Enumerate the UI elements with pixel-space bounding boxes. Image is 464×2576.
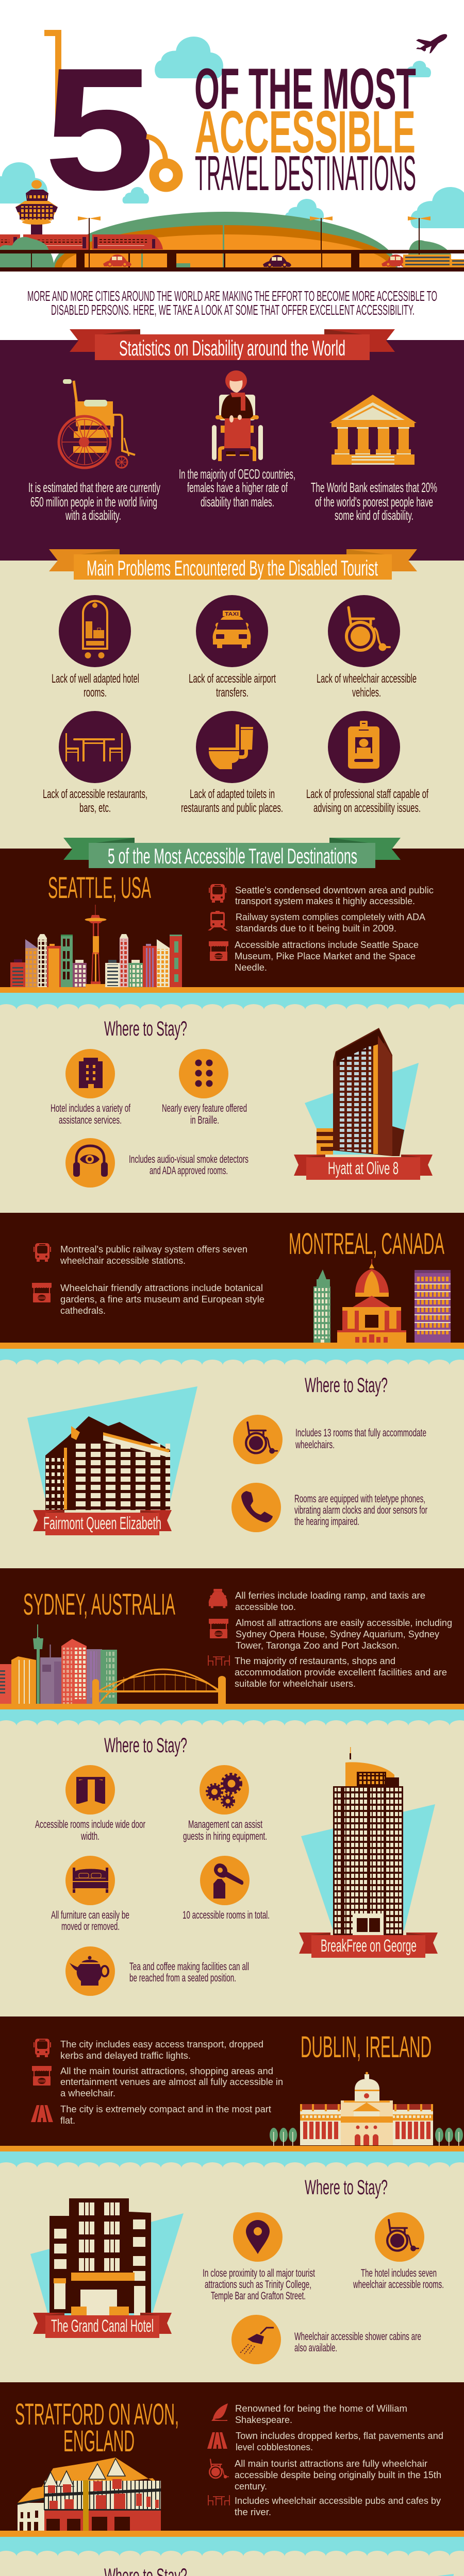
text: fully accessible: All main tourist attractions are fully wheelchair — [235, 2458, 427, 2469]
text: smoke detectors: and ADA approved rooms. — [150, 1164, 228, 1177]
icon: wheelchair — [328, 595, 400, 667]
text: pubs: Includes wheelchair accessible pubs and cafes by — [235, 2495, 441, 2506]
icon: shower — [231, 2315, 281, 2364]
numeral five with wheelchair handle — [44, 30, 178, 226]
icon: market stall — [209, 1619, 228, 1638]
text: tea and coffee: Tea and coffee making facilities can all — [129, 1960, 249, 1973]
heading: where to stay: Where to Stay? — [305, 1374, 388, 1397]
text: assistance: assistance services. — [59, 1114, 122, 1126]
icon: braille dots — [179, 1049, 228, 1098]
icon: wheelchair — [59, 379, 135, 468]
text: Seattle railway: standards due to it being built in 2009. — [236, 923, 396, 934]
elevated road — [0, 250, 464, 272]
text: restaurants — [43, 787, 147, 815]
icon: market stall — [209, 941, 228, 961]
illustration: Sydney skyline — [0, 1624, 226, 1704]
icon: wheelchair — [209, 2459, 228, 2479]
panel: Sydney where to stay — [35, 1734, 438, 1996]
heading: where to stay: Where to Stay? — [104, 1018, 187, 1040]
heading ribbon: main problems — [49, 549, 417, 580]
control tower — [15, 180, 58, 234]
icon: train — [208, 911, 228, 930]
text: compact: The city is extremely compact and in the most part — [60, 2104, 271, 2114]
icon: hotel building — [65, 1049, 115, 1098]
text: restaurants: Lack of accessible restaurants, — [43, 787, 147, 801]
text: assistance: Hotel includes a variety of — [51, 1102, 130, 1114]
text: staff — [306, 787, 428, 815]
text: Montreal attractions: cathedrals. — [60, 1305, 106, 1316]
text: Dublin transport: The city includes easy access transport, dropped — [60, 2039, 263, 2049]
text: fully accessible: century. — [235, 2481, 267, 2492]
illustration: Hyatt at Olive 8: Hyatt at Olive 8 — [328, 1159, 399, 1178]
illustration: Dublin building — [270, 2072, 463, 2146]
text: Sydney attractions: Tower, Taronga Zoo and Port Jackson. — [236, 1640, 400, 1651]
text: OECD females — [179, 466, 295, 510]
icon: bank — [329, 395, 417, 465]
text: wide door — [35, 1818, 145, 1842]
handle bar — [44, 30, 61, 126]
panel: Dublin where to stay — [30, 2176, 444, 2364]
text: braille: in Braille. — [190, 1114, 219, 1126]
text: proximity: In close proximity to all major tourist — [203, 2267, 315, 2279]
text: Dublin attractions — [60, 2065, 283, 2098]
illustration: airport scene — [0, 180, 464, 272]
title — [194, 57, 416, 201]
text: tea and coffee — [129, 1960, 249, 1984]
floor and scallop band — [0, 2146, 464, 2168]
text: pubs: the river. — [235, 2506, 271, 2517]
panel: Sydney — [0, 1568, 464, 1726]
floor and scallop band — [0, 2531, 464, 2556]
text: Montreal railway — [60, 1244, 247, 1266]
panel: hero header — [0, 0, 464, 340]
text: Sydney restaurants: The majority of restaurants, shops and — [235, 1655, 395, 1666]
text: airport transfers — [189, 672, 276, 700]
text: Montreal railway: wheelchair accessible stations. — [60, 1255, 186, 1266]
icon: taxi: TAXI — [225, 611, 239, 617]
icon: id badge — [328, 711, 400, 783]
icon: luggage cart — [59, 595, 131, 667]
text: kerbs — [236, 2430, 443, 2452]
icon: key — [200, 1856, 250, 1905]
icon: map pin — [233, 2212, 283, 2262]
text: Seattle attractions — [235, 939, 419, 973]
icon: bus — [209, 884, 226, 903]
heading: where to stay: Where to Stay? — [104, 1734, 187, 1757]
text: Seattle railway: Railway system complies completely with ADA — [236, 911, 426, 922]
text: shower cabins: also available. — [294, 2342, 337, 2354]
illustration: BreakFree on George — [299, 1747, 438, 1958]
text: ten rooms: 10 accessible rooms in total. — [183, 1909, 270, 1921]
icon: plane — [416, 34, 447, 54]
text: seven rooms — [353, 2267, 444, 2291]
illustration: Stratford Tudor house — [18, 2458, 161, 2531]
text: rooms: wheelchairs. — [295, 1438, 335, 1451]
trees — [270, 2128, 463, 2146]
text: braille: Nearly every feature offered — [162, 1102, 247, 1114]
text: Shakespeare: Renowned for being the home of William — [235, 2403, 407, 2414]
text: Seattle railway — [236, 911, 426, 934]
text: furniture — [51, 1909, 129, 1933]
text: Sydney restaurants: suitable for wheelchair users. — [235, 1678, 356, 1689]
heading: where to stay: Where to Stay? — [305, 2176, 388, 2199]
icon: table — [208, 1655, 229, 1666]
text: teletype — [294, 1493, 427, 1528]
text: furniture: moved or removed. — [61, 1920, 120, 1933]
panel: Seattle — [0, 838, 464, 1010]
text: rooms — [295, 1427, 426, 1451]
city name: Sydney: SYDNEY, AUSTRALIA — [23, 1588, 175, 1621]
text: hotel rooms: Lack of well adapted hotel — [52, 672, 139, 686]
icon: door — [65, 1765, 115, 1815]
panel: Montreal — [0, 1213, 464, 1365]
icon: wheelchair — [233, 1415, 283, 1464]
text: assistance — [51, 1102, 130, 1126]
text: wide door: width. — [80, 1830, 100, 1842]
text: OECD females: In the majority of OECD countries, — [179, 466, 295, 482]
text: Dublin transport: kerbs and delayed traffic lights. — [60, 2050, 191, 2061]
icon: wheelchair — [375, 2212, 424, 2262]
illustration: Montreal buildings — [313, 1259, 451, 1343]
text: Dublin attractions: All the main tourist attractions, shopping areas and — [60, 2065, 273, 2076]
terminal building — [403, 255, 464, 267]
icon: taxi — [209, 1589, 227, 1608]
icon: road — [31, 2105, 53, 2122]
wheelchair wheel — [146, 137, 178, 187]
text: Sydney attractions — [236, 1617, 452, 1651]
icon: bus — [34, 1243, 51, 1262]
text: Dublin transport — [60, 2039, 263, 2061]
text: Seattle attractions: Needle. — [235, 962, 267, 973]
text: 650 million — [28, 480, 160, 523]
text: teletype: the hearing impaired. — [294, 1515, 359, 1528]
clouds — [0, 37, 464, 228]
text: Sydney ferries: accessible too. — [235, 1601, 296, 1612]
text: Sydney restaurants — [235, 1655, 447, 1689]
text: Seattle transport — [235, 885, 434, 906]
text: proximity: attractions such as Trinity College, — [205, 2278, 311, 2291]
text: tea and coffee: be reached from a seated position. — [129, 1972, 236, 1984]
panel: Stratford: STRATFORD ON AVON, — [15, 2398, 179, 2431]
icon: bed — [65, 1856, 115, 1905]
icon: road — [207, 2432, 227, 2449]
text: hotel rooms — [52, 672, 139, 700]
panel: Seattle where to stay — [51, 1018, 433, 1188]
icon: table — [208, 2495, 229, 2505]
text: Seattle transport: Seattle's condensed downtown area and public — [235, 885, 434, 895]
text: Seattle transport: transport system makes it highly accessible. — [235, 895, 415, 906]
text: wheelchair vehicles — [317, 672, 417, 700]
trees — [0, 237, 451, 267]
text: hiring equipment: Management can assist — [188, 1818, 262, 1831]
icon: woman in wheelchair — [212, 370, 263, 461]
text: Shakespeare: Shakespeare. — [235, 2414, 292, 2425]
floor and scallop band — [0, 1704, 464, 1726]
icon: phone — [231, 1483, 281, 1532]
text: World Bank — [311, 480, 437, 523]
text: Sydney attractions: Sydney Opera House, Sydney Aquarium, Sydney — [236, 1629, 440, 1639]
text: airport transfers: transfers. — [216, 686, 248, 700]
icon: taxi — [196, 595, 268, 667]
cars — [103, 255, 410, 267]
text: compact — [60, 2104, 271, 2126]
floor and scallop band — [0, 1343, 464, 1365]
text: kerbs: Town includes dropped kerbs, flat pavements and — [236, 2430, 443, 2441]
text: fully accessible — [235, 2458, 441, 2492]
text: fully accessible: accessible despite being originally built in the 15th — [235, 2469, 441, 2480]
text: braille — [162, 1102, 247, 1126]
panel: Dublin — [0, 2016, 464, 2168]
text: hotel rooms: rooms. — [84, 686, 107, 700]
text: proximity — [203, 2267, 315, 2302]
text: restaurants: bars, etc. — [79, 801, 111, 815]
text: smoke detectors: Includes audio-visual smoke detectors — [129, 1153, 248, 1165]
text: toilets — [181, 787, 283, 815]
text: wheelchair vehicles: vehicles. — [352, 686, 381, 700]
text: Dublin attractions: entertainment venues are almost all fully accessible in — [60, 2076, 283, 2087]
text: 650 million: with a disability. — [65, 507, 121, 523]
icon: market stall — [32, 2066, 52, 2086]
panel: Stratford where to stay — [37, 2565, 454, 2576]
text: 650 million: It is estimated that there are currently — [28, 480, 160, 495]
icon: quill — [211, 2403, 228, 2421]
icon: bus — [34, 2039, 51, 2057]
panel: Montreal where to stay — [27, 1374, 427, 1535]
text: OECD females: disability than males. — [201, 494, 274, 510]
icon: market stall — [32, 1283, 52, 1302]
panel: statistics — [0, 329, 464, 561]
text: Seattle attractions: Museum, Pike Place Market and the Space — [235, 951, 416, 961]
panel: main problems — [43, 549, 428, 815]
text: kerbs: level cobblestones. — [236, 2442, 313, 2452]
text: Shakespeare — [235, 2403, 407, 2425]
illustration: The Grand Canal Hotel: The Grand Canal Hotel — [51, 2316, 154, 2336]
text: Montreal attractions: gardens, a fine arts museum and European style — [60, 1294, 264, 1304]
illustration: Fairmont Queen Elizabeth: Fairmont Queen Elizabeth — [43, 1514, 161, 1533]
illustration: Fairmont Queen Elizabeth — [27, 1386, 197, 1535]
text: airport transfers: Lack of accessible airport — [189, 672, 276, 686]
lamp posts — [78, 216, 430, 252]
text: Sydney attractions: Almost all attractions are easily accessible, including — [236, 1617, 452, 1628]
icon: teapot — [65, 1946, 115, 1996]
text: proximity: Temple Bar and Grafton Street. — [211, 2290, 306, 2302]
illustration: Seattle skyline — [10, 905, 182, 988]
large numeral 5: 5 — [44, 31, 155, 226]
text: OECD females: females have a higher rate of — [187, 480, 288, 495]
text: furniture: All furniture can easily be — [51, 1909, 129, 1921]
text: wide door: Accessible rooms include wide door — [35, 1818, 145, 1831]
text: hiring equipment — [183, 1818, 267, 1842]
illustration: Hyatt at Olive 8 — [294, 1028, 433, 1180]
airport dome — [53, 212, 397, 271]
icon: gears — [200, 1765, 249, 1815]
text: toilets: restaurants and public places. — [181, 801, 283, 815]
text: Seattle attractions: Accessible attractions include Seattle Space — [235, 939, 419, 950]
heading ribbon: destinations — [63, 838, 401, 868]
text: Montreal attractions: Wheelchair friendly attractions include botanical — [60, 1282, 263, 1293]
text: hiring equipment: guests in hiring equipment. — [183, 1830, 267, 1842]
text: Montreal railway: Montreal's public railway system offers seven — [60, 1244, 247, 1255]
floor and scallop band — [0, 987, 464, 1010]
icon: audio visual — [65, 1138, 115, 1188]
panel: Seattle: SEATTLE, USA — [48, 871, 151, 905]
icon: table and chairs — [59, 711, 131, 783]
text: Sydney restaurants: accommodation provide excellent facilities and are — [235, 1667, 447, 1677]
text: toilets: Lack of adapted toilets in — [190, 787, 275, 801]
text: compact: flat. — [60, 2115, 75, 2126]
text: Sydney ferries — [235, 1590, 425, 1612]
text: Dublin attractions: a wheelchair. — [60, 2088, 115, 2098]
illustration: The Grand Canal Hotel — [30, 2198, 184, 2338]
illustration: The New Inn Hotel — [274, 2574, 454, 2576]
train — [0, 234, 163, 250]
text: Montreal attractions — [60, 1282, 264, 1316]
heading ribbon: statistics — [70, 329, 395, 360]
text: shower cabins — [294, 2330, 421, 2354]
panel: Stratford — [0, 2382, 464, 2556]
text: pubs — [235, 2495, 441, 2517]
intro text — [27, 288, 437, 318]
text: 650 million: 650 million people in the world living — [30, 494, 157, 510]
city name: Stratford — [15, 2398, 179, 2458]
text: smoke detectors — [129, 1153, 248, 1177]
icon: toilet — [196, 711, 268, 783]
text: Sydney ferries: All ferries include loading ramp, and taxis are — [235, 1590, 425, 1601]
city name: Stratford: ENGLAND — [63, 2425, 135, 2458]
